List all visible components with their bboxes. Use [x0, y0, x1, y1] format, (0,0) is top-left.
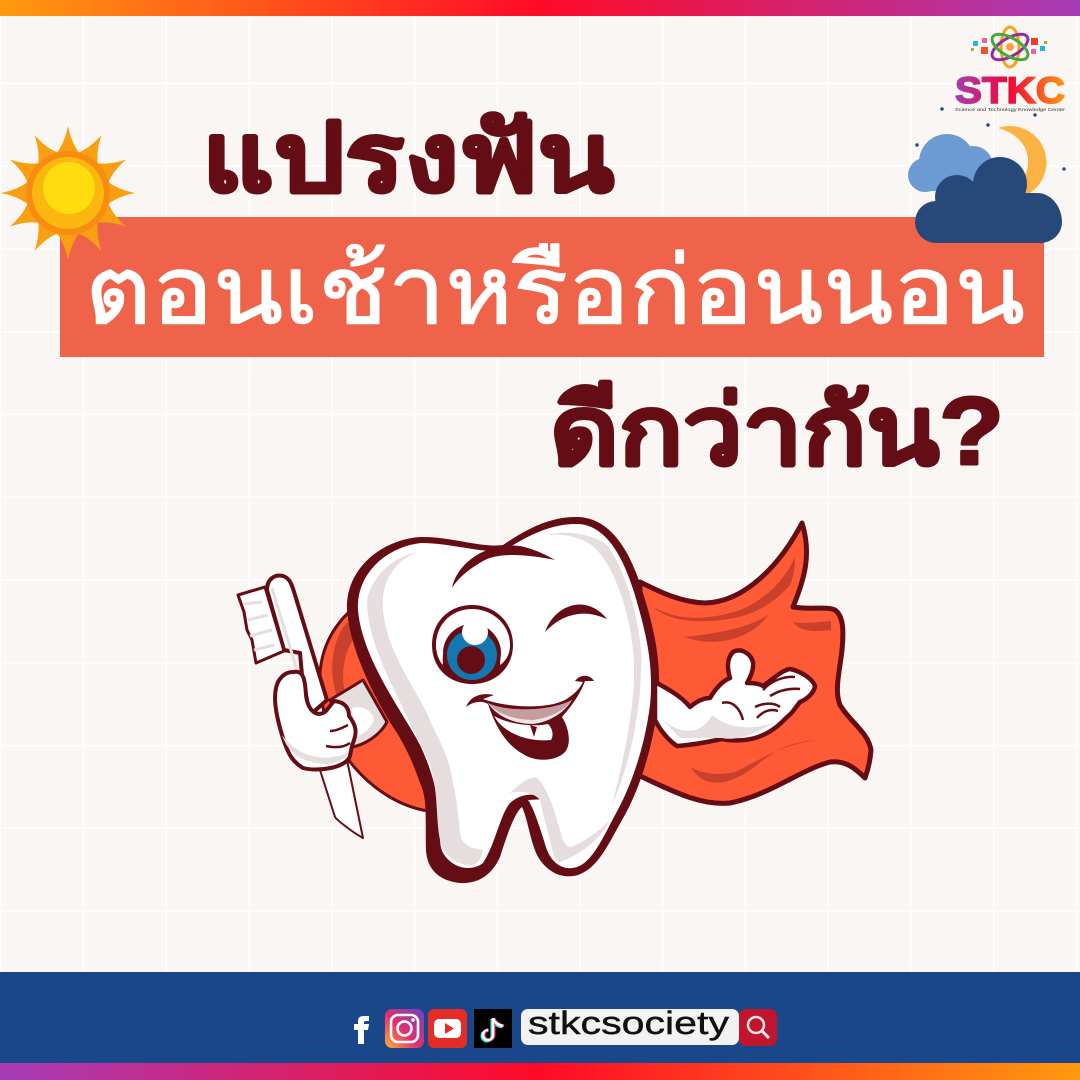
illustration: tooth mascot [238, 517, 871, 883]
heading line 2: ตอนเช้าหรือก่อนนอน [85, 238, 1025, 343]
mouth [466, 676, 594, 760]
icon: youtube [428, 1009, 467, 1048]
tooth body [358, 524, 651, 868]
top gradient bar [0, 0, 1080, 16]
hand holding toothbrush [275, 672, 356, 770]
eye [432, 605, 513, 684]
heading line 1: แปรงฟัน [202, 105, 614, 212]
tooth shading [367, 533, 641, 865]
tooth outline [347, 517, 659, 883]
icon: search button [739, 1009, 777, 1046]
winking eye [545, 604, 607, 632]
icon: tiktok [474, 1009, 512, 1048]
search field [521, 1009, 739, 1045]
icon: sun [0, 125, 136, 261]
cape left [320, 612, 440, 811]
title banner [60, 217, 1044, 357]
handle text: stkcsociety [528, 1005, 729, 1041]
logo: STKC [955, 27, 1066, 112]
icon: facebook [354, 1016, 369, 1044]
logo wordmark: STKC [955, 70, 1065, 111]
logo tagline: Science and Technology Knowledge Center [955, 107, 1066, 112]
cape right [638, 523, 871, 803]
bottom gradient bar [0, 1063, 1080, 1080]
arm behind hand [330, 680, 387, 747]
eyebrow [452, 545, 555, 588]
heading line 3: ดีกว่ากัน? [550, 378, 1004, 485]
icon: instagram [385, 1009, 424, 1048]
icon: night clouds and moon [908, 107, 1066, 243]
footer band [0, 972, 1080, 1063]
social handle row [354, 1005, 777, 1048]
logo atom symbol [971, 27, 1047, 67]
waving hand [655, 650, 815, 746]
toothbrush [238, 576, 363, 838]
